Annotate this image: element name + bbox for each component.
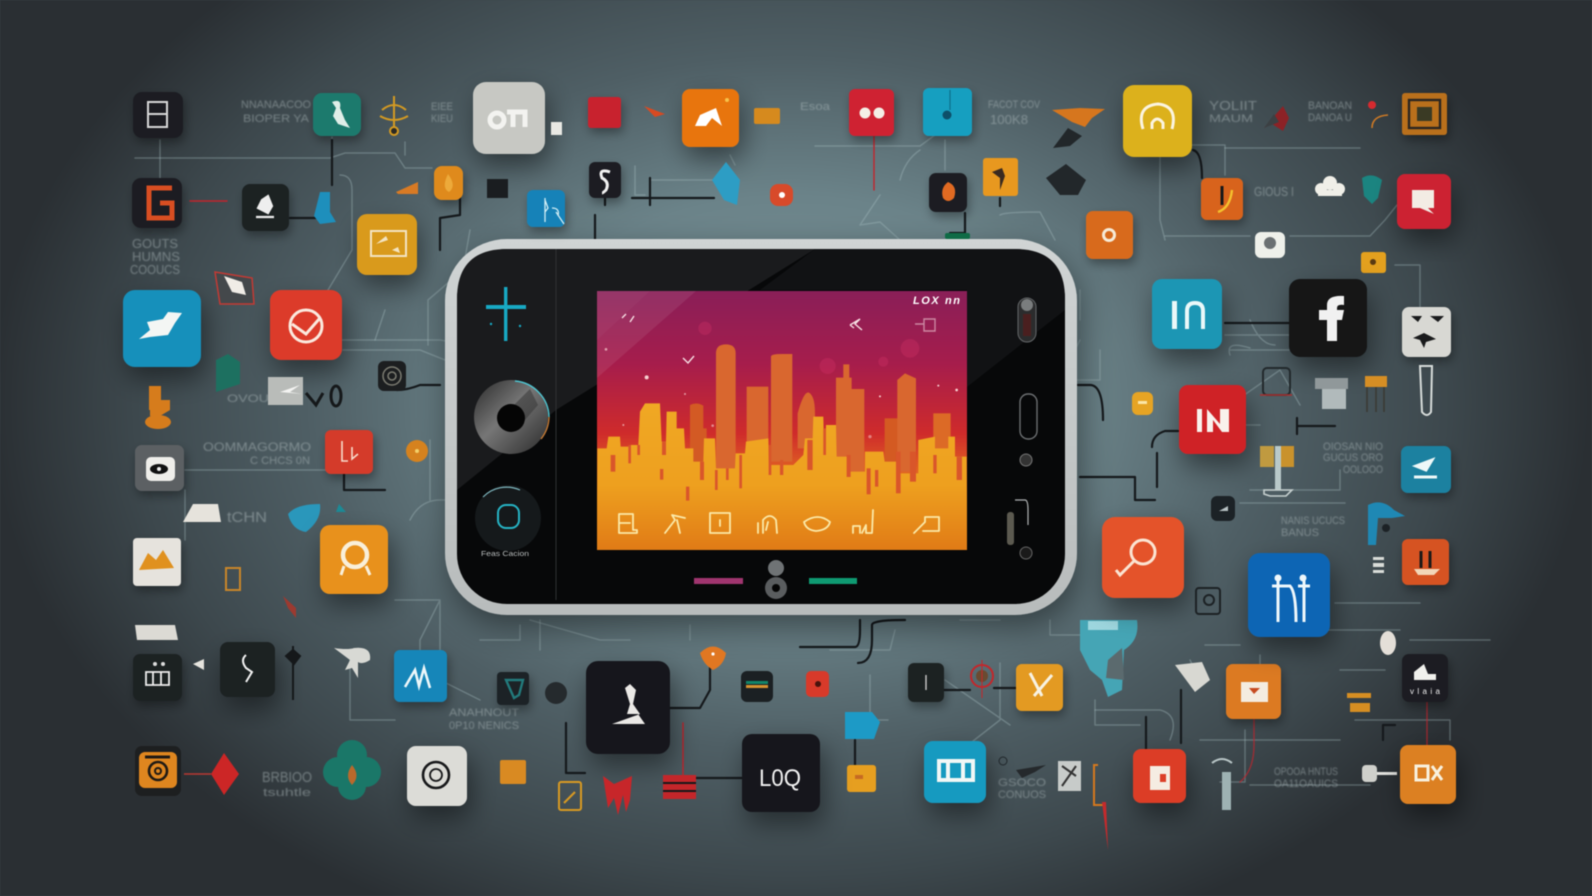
icon: key tile (1102, 517, 1184, 598)
icon: green bottle (216, 354, 240, 392)
icon: black check marks (306, 386, 341, 406)
icon: amber flower tile (983, 158, 1018, 196)
icon: amber picture tile (357, 214, 417, 275)
icon: dark S tile (589, 162, 621, 198)
icon: striped pad (1373, 557, 1384, 573)
small grey captions: BIOPER YA (243, 113, 310, 125)
icon: orange XO tile (1400, 745, 1456, 804)
icon: amber small dot (1361, 252, 1386, 273)
icon: spiral (378, 361, 406, 391)
icon: red drips (603, 776, 632, 815)
small grey captions: OOLOOO (1343, 464, 1383, 476)
icon: eye tile (135, 445, 184, 491)
icon: white tent (183, 504, 221, 522)
icon: white face tile (1402, 307, 1451, 357)
icon: black tree (286, 646, 300, 700)
icon: dark fountain tile (586, 661, 670, 754)
icon: red IN tile (1179, 385, 1246, 454)
icon: teal glyph (313, 93, 361, 136)
icon: dark swirl outline (1196, 588, 1220, 614)
icon: white squid (334, 648, 370, 678)
icon: plus (486, 287, 526, 341)
icon: orange photo tile (682, 89, 739, 147)
icon: dark tick tile (908, 663, 944, 702)
small grey captions: C CHCS 0N (250, 455, 310, 467)
icon: amber small tile left (500, 760, 526, 784)
small grey captions: BRBIOO (262, 769, 312, 786)
button caption: Feas Cacion (481, 549, 529, 558)
icon: small orange chevron (396, 182, 418, 194)
icon: blue pes (527, 190, 565, 227)
small grey captions: NANIS UCUCS (1281, 515, 1345, 527)
icon: orange screen tile (1226, 664, 1281, 719)
screen top label: LOX nn (913, 295, 960, 307)
icon: blue mountain tile (394, 650, 447, 702)
icon: light grey tile (473, 82, 545, 154)
screen sparkles (622, 314, 935, 363)
icon: mountain tile (133, 538, 181, 586)
small grey captions: KIEU (431, 113, 453, 125)
icon: bird tile (123, 290, 201, 367)
icon: blue wing (712, 162, 740, 205)
icon: cyan tap (1080, 620, 1137, 697)
icon: red target (971, 660, 993, 698)
small grey captions: NNANAACOO (241, 99, 311, 111)
icon: white cloud skull (1315, 176, 1345, 196)
icon: half disc (545, 682, 567, 704)
icon: red diamond (184, 753, 239, 795)
small grey captions: MAUM (1209, 113, 1253, 125)
skyline (596, 322, 968, 516)
icon: orange frame (1402, 93, 1447, 135)
small grey captions: OIOSAN NIO (1323, 441, 1383, 453)
icon: teal tile (1401, 446, 1451, 493)
icon: red pin (1368, 101, 1388, 128)
screen (597, 291, 967, 552)
icon: white sail (1175, 662, 1210, 692)
icon: white egg (1380, 631, 1396, 655)
icon: red Li tile (325, 430, 373, 474)
icon: dark red diamond (1264, 106, 1289, 131)
glass reflections (457, 249, 815, 490)
small grey captions: 0P10 NENICS (449, 720, 519, 732)
small grey captions: Esoa (800, 101, 831, 113)
icon: pale post (1212, 759, 1232, 810)
small grey captions: OVOU (227, 393, 269, 405)
icon: grey photo chip (268, 377, 303, 405)
icon: amber tag (754, 108, 780, 124)
small grey captions: GUCUS ORO (1323, 452, 1383, 464)
icon: teal flower (323, 740, 381, 800)
icon: red bookmark (588, 97, 621, 128)
icon: facebook tile (1289, 279, 1367, 357)
icon: metal cylinder (1315, 378, 1348, 409)
screen icons (619, 510, 939, 533)
icon: qr card (1058, 761, 1081, 791)
icon: blue people tile (1248, 553, 1330, 637)
icon: white tray (135, 625, 178, 640)
device face (457, 249, 1065, 604)
icon: red chip (806, 671, 829, 697)
icon: red black box (663, 775, 696, 799)
small grey captions: ANAHNOUT (449, 707, 519, 719)
small grey captions: OPOOA HNTUS (1274, 766, 1338, 778)
icon: red leaf marks (644, 106, 665, 117)
icon: green tab (945, 233, 970, 239)
icon: white swirl tile (407, 746, 467, 806)
small grey captions: EIEE (431, 101, 453, 113)
icon: red dot tile (770, 184, 793, 206)
icon: dark stripes tile (741, 671, 773, 702)
icon: orange ring tile (320, 525, 388, 594)
small grey captions: COOUCS (130, 262, 180, 277)
icon: small white chip (551, 122, 562, 135)
icon: small black square (487, 179, 508, 198)
icon: dark caption tile (1402, 654, 1448, 702)
small grey captions: FACOT COV (988, 99, 1041, 111)
icon: orange bag tile (1402, 539, 1449, 585)
icon: dark bird (999, 757, 1046, 778)
small grey captions: GIOUS I (1254, 184, 1294, 199)
icon: red speech tile (1397, 174, 1451, 229)
icon: amber small tile (847, 765, 876, 792)
small grey captions: GOUTS (132, 236, 178, 251)
small grey captions: CONUOS (998, 789, 1046, 801)
icon: red tick (283, 596, 296, 618)
home button (475, 485, 541, 551)
bottom indicators (694, 560, 857, 599)
icon: dark book tile (133, 654, 182, 701)
icon: amber card (559, 782, 581, 810)
icon: orange loop (1094, 765, 1108, 850)
device (445, 239, 1077, 615)
icon: teal bulb (1362, 175, 1382, 204)
icon: dark hook tile (220, 642, 275, 697)
small grey captions: BANOAN (1308, 100, 1352, 112)
small grey captions: 100K8 (990, 112, 1028, 127)
icon: In tile (1152, 279, 1222, 349)
icon: dark caption tile: vlaia (1410, 687, 1441, 696)
icon: dark LOG tile: L0Q (759, 765, 801, 792)
icon: orange dot (406, 440, 428, 462)
icon: dark console (1260, 368, 1292, 395)
icon: gold ornament (380, 96, 408, 135)
icon: white red folder (215, 272, 254, 304)
dial (474, 380, 549, 454)
small grey captions: DANOA U (1308, 112, 1352, 124)
icon: grey plug (1362, 765, 1397, 782)
icon: orange circle tile (1086, 211, 1133, 259)
icon: blue corner tile (845, 712, 880, 739)
icon: orange chair (145, 386, 171, 429)
icon: blue wing left (314, 192, 336, 224)
icon: orange flame tile (1201, 178, 1243, 220)
small grey captions: tsuhtle (263, 787, 311, 799)
icon: white clip (1420, 366, 1432, 415)
icon: orange drop (434, 166, 463, 200)
small grey captions: YOLIIT (1209, 98, 1257, 113)
small grey captions: OOMMAGORMO (203, 440, 311, 454)
icon: amber tools tile (1016, 664, 1063, 711)
icon: orange stool (1365, 376, 1387, 412)
small grey captions: HUMNS (132, 249, 180, 264)
icon: cyan dot (923, 88, 972, 136)
icon: bars and hook (1260, 446, 1294, 496)
icon: orange bird (1052, 108, 1105, 127)
icon: film tile dark (133, 92, 183, 138)
icon: yellow arch tile (1123, 85, 1192, 157)
icon: amber chip (1132, 392, 1153, 415)
icon: blue shield (288, 504, 346, 532)
icon: dark LOG tile (742, 734, 820, 812)
icon: black chip (1211, 496, 1235, 521)
icon: dark orange tile (929, 173, 967, 212)
small grey captions (130, 98, 1383, 801)
icon: film tile (924, 741, 986, 803)
icon: orange bars (1347, 693, 1371, 712)
icon: red swirl tile (270, 290, 342, 360)
icon: white gear (1255, 232, 1285, 258)
small grey captions: tCHN (227, 509, 267, 526)
icon: orange spiral tile (135, 746, 181, 796)
icon: orange pin (700, 646, 726, 670)
icon: black leaf (1046, 128, 1086, 195)
side controls (1007, 298, 1037, 559)
icon: red two dots (849, 89, 894, 136)
circuit lines (135, 135, 1490, 785)
icon: G tile (132, 178, 182, 228)
icon: shield chip (497, 672, 529, 705)
icon: orange card outline (226, 568, 240, 590)
icon: red R tile (1133, 749, 1186, 803)
small grey captions: GSOCO (998, 777, 1047, 789)
device body (445, 239, 1077, 615)
icon: blue hood (1368, 502, 1405, 545)
icon: white pointer (193, 659, 204, 670)
small grey captions: BANUS (1281, 527, 1319, 539)
icon: dark microscope (242, 184, 289, 231)
small grey captions: OA11OAUICS (1274, 778, 1338, 790)
